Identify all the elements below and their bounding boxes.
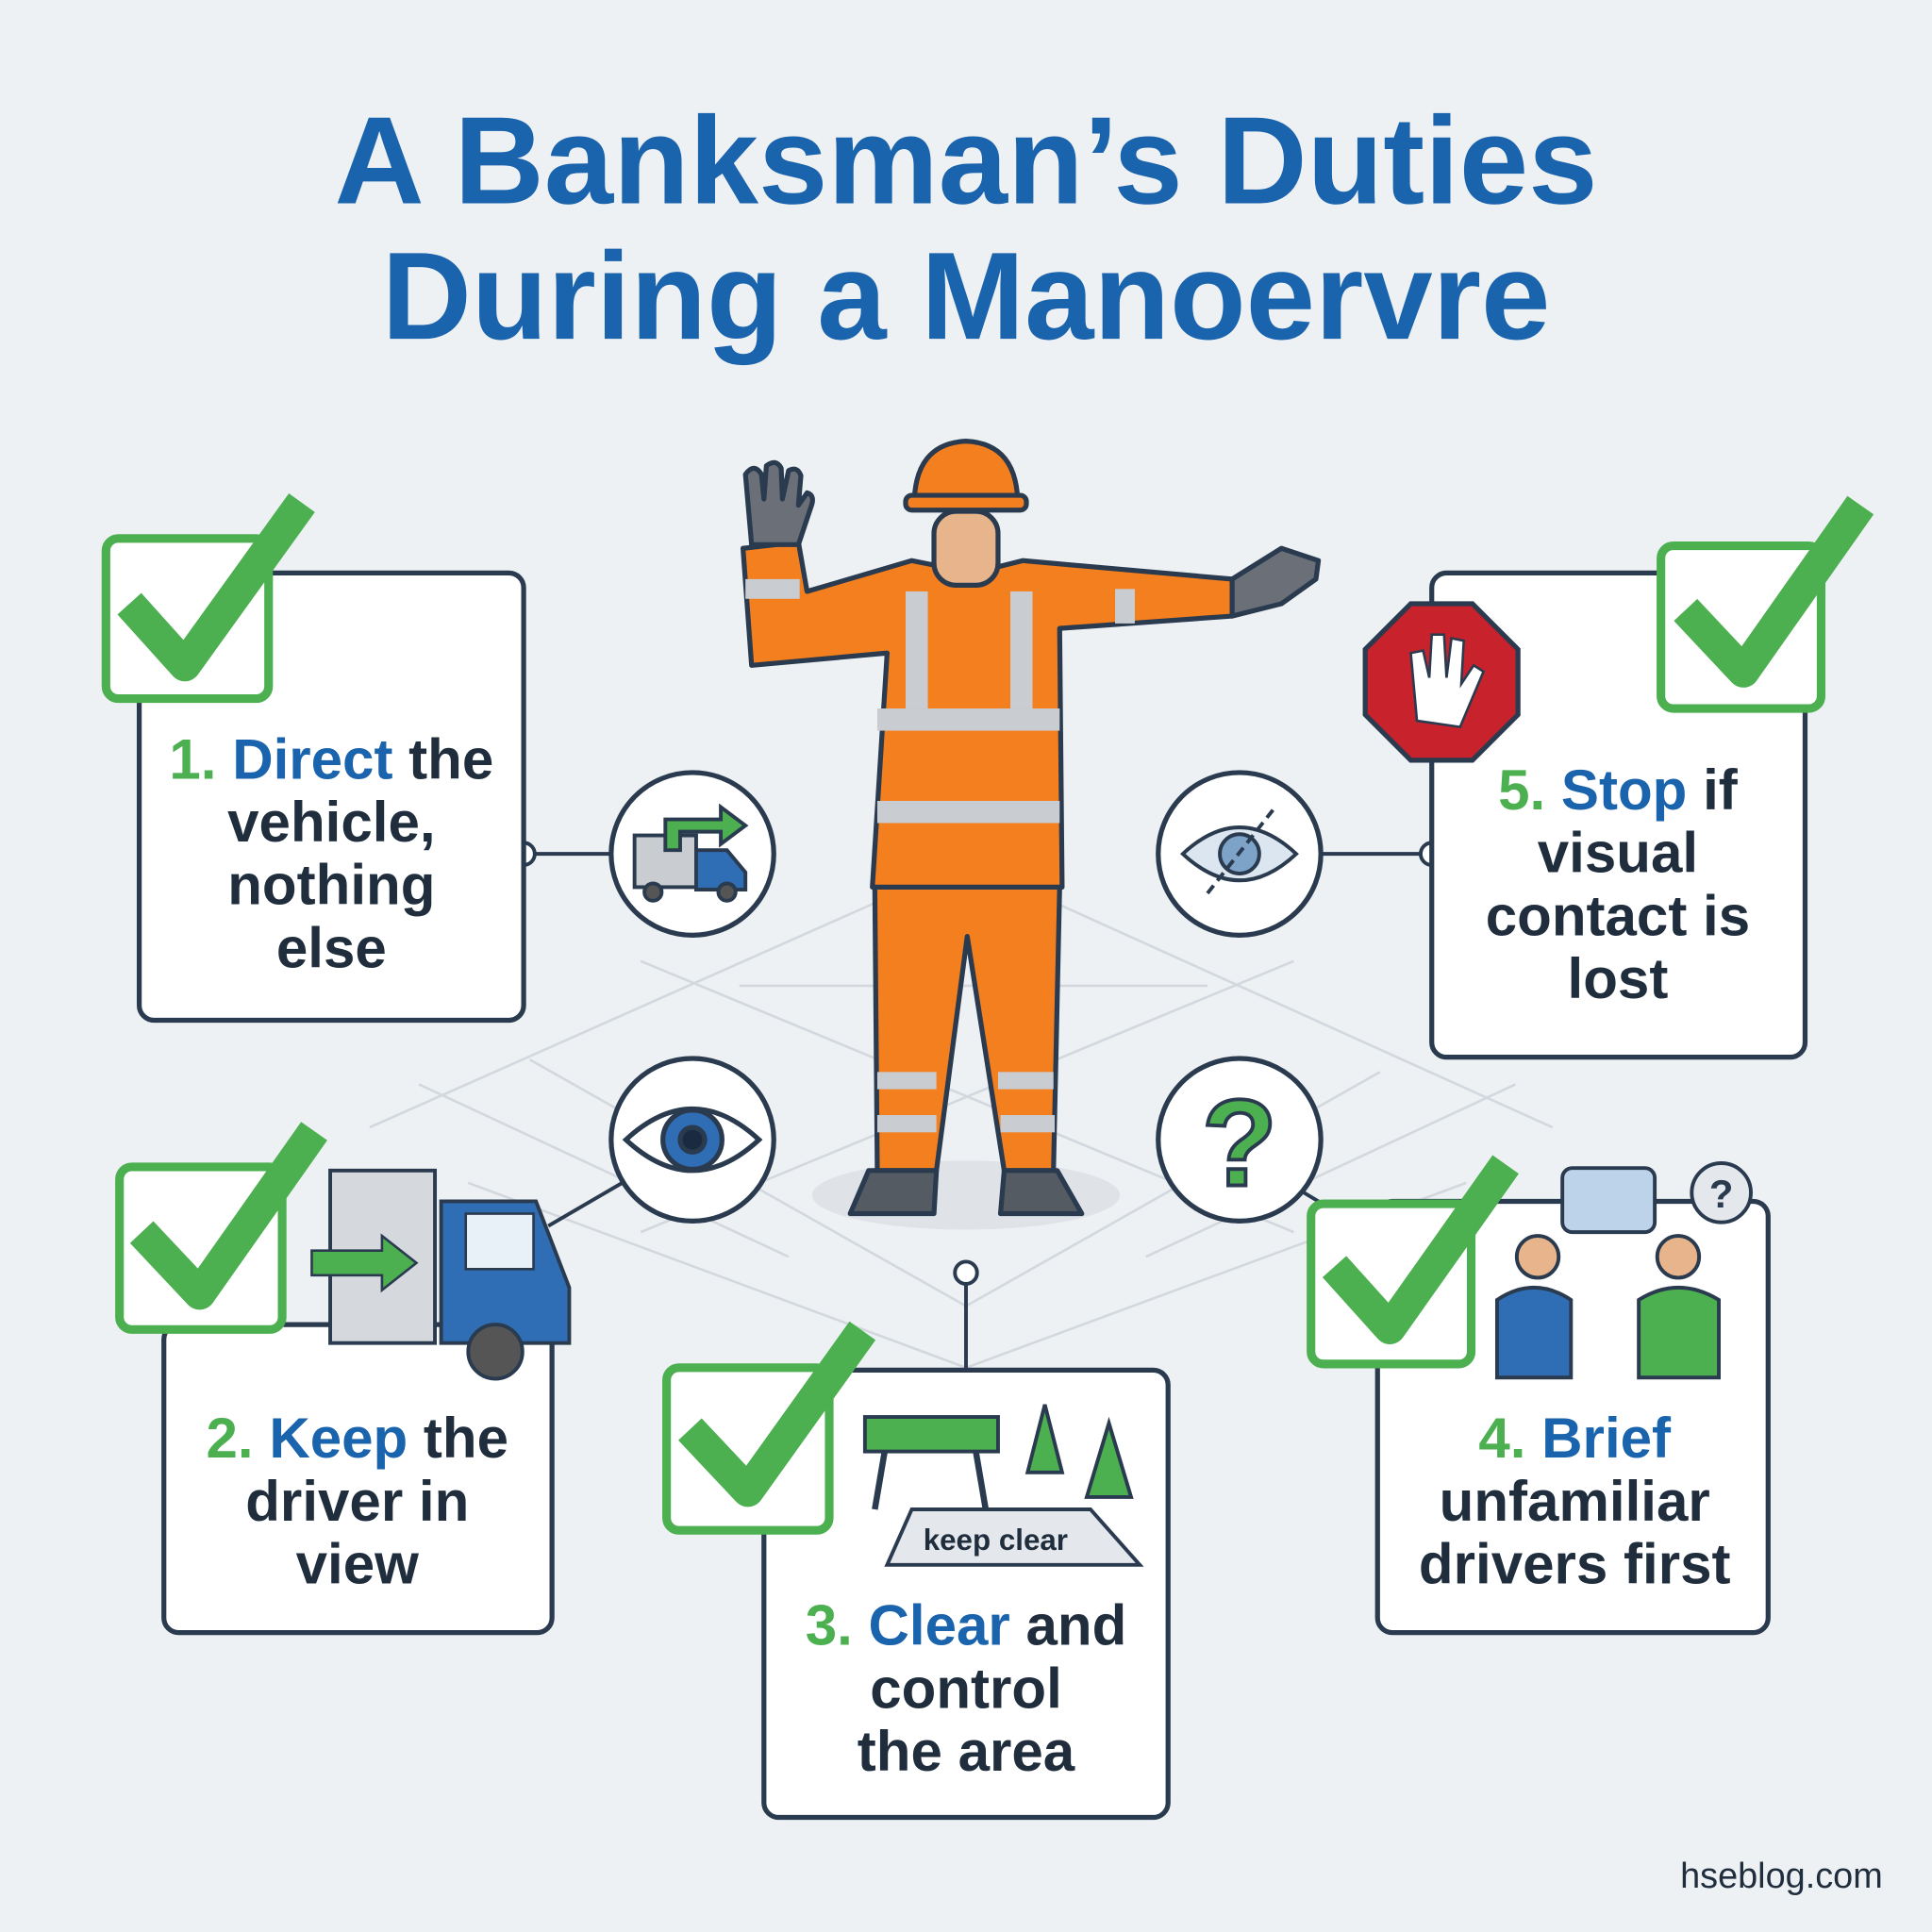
panel 5: 5. Stop if [1498,758,1739,822]
panel 2: 2. Keep the [207,1407,508,1470]
panel 5: visual [1538,822,1698,885]
icon: truck direction [635,808,745,901]
panel 3: 3. Clear and [806,1594,1126,1657]
panel 2: view [296,1532,419,1595]
panel 4: drivers first [1419,1532,1731,1595]
panel 4: unfamiliar [1440,1470,1710,1533]
panel 2: driver in [245,1470,469,1533]
panel 4: 4. Brief [1478,1407,1672,1470]
panel 4 [1311,1163,1768,1633]
title: During a Manoervre [382,226,1550,365]
panel 3: control [870,1657,1062,1720]
panel 3: the area [858,1720,1075,1783]
worker figure [743,441,1319,1230]
title: A Banksman’s Duties [334,92,1598,230]
panel 1: else [276,916,387,979]
icon: question: ? [1202,1074,1277,1211]
panel 1: 1. Direct the [169,727,493,791]
panel 5: lost [1568,947,1668,1010]
footer credit: hseblog.com [1680,1857,1883,1896]
panel 2 [120,1131,569,1633]
panel 5 [1365,506,1860,1058]
panel 3 [667,1331,1168,1818]
panel 4: ? [1709,1172,1733,1216]
icon circles [611,773,1321,1221]
panel 5: contact is [1486,884,1750,947]
icon: eye [626,1109,759,1171]
panel 1: nothing [227,854,435,917]
panel 3: keep clear [924,1524,1068,1557]
panel 1 [106,503,524,1020]
title [334,92,1598,365]
connectors [512,842,1442,1370]
icon: eye crossed [1183,808,1296,893]
panel 1: vehicle, [227,791,436,854]
